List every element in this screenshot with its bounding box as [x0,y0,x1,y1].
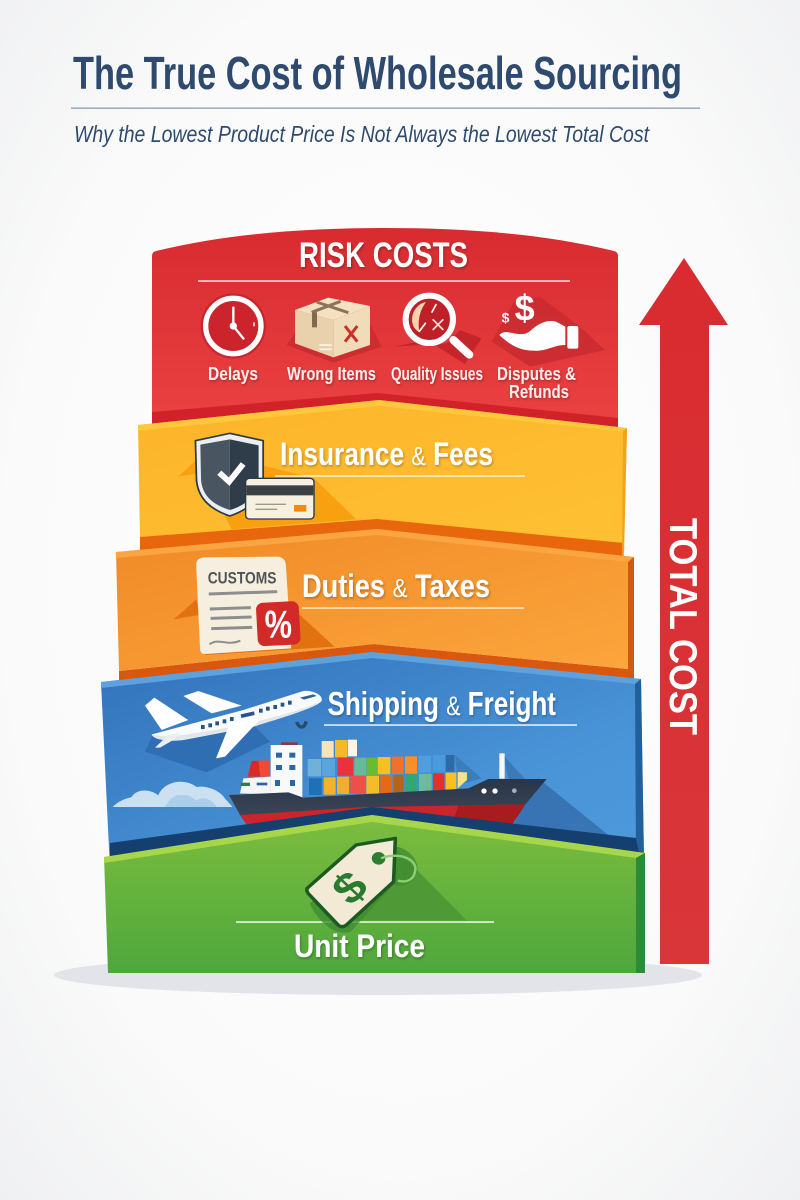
arrow label: TOTAL COST [661,518,704,735]
icon: hand with refund: $ [502,309,510,325]
icon: hand with refund [492,288,605,367]
panel: shipping and freight [101,652,644,880]
heading: insurance and fees: Insurance & Fees [280,436,493,472]
icon: cargo ship [229,740,608,835]
icon: shield and card [178,433,356,529]
risk icons [201,288,605,367]
icon: wrong item box [287,298,382,363]
label: disputes and refunds: Disputes & [497,364,576,384]
label: disputes and refunds: Refunds [509,382,569,402]
icon: customs document [174,557,334,655]
icon: airplane [138,691,322,772]
navy base band [110,807,644,880]
subtitle: Why the Lowest Product Price Is Not Always the Lowest Total Cost [74,121,650,147]
risk heading: RISK COSTS [299,236,468,275]
icon: customs document: CUSTOMS [208,569,276,587]
panel: unit price [104,815,645,973]
arrow: total cost [639,258,728,964]
label: wrong items: Wrong Items [287,364,376,384]
panel: duties and taxes [116,529,634,700]
icon: price tag [307,838,467,933]
heading: shipping and freight: Shipping & Freight [328,685,556,722]
panel: insurance and fees [138,400,627,570]
ground shadow [54,955,702,995]
icon: customs document: % [265,602,292,646]
icon: price tag: $ [322,861,378,914]
heading: unit price: Unit Price [294,928,425,964]
label: delays: Delays [208,364,258,384]
icon: magnifier quality issues [393,296,482,364]
label: quality issues: Quality Issues [391,364,483,384]
icon: cloud [113,782,233,807]
label: disputes and refunds [497,364,576,402]
heading: duties and taxes: Duties & Taxes [302,568,490,604]
panel: risk costs [152,228,618,440]
icon: clock [201,293,266,359]
icon: hand with refund: $ [515,288,535,329]
